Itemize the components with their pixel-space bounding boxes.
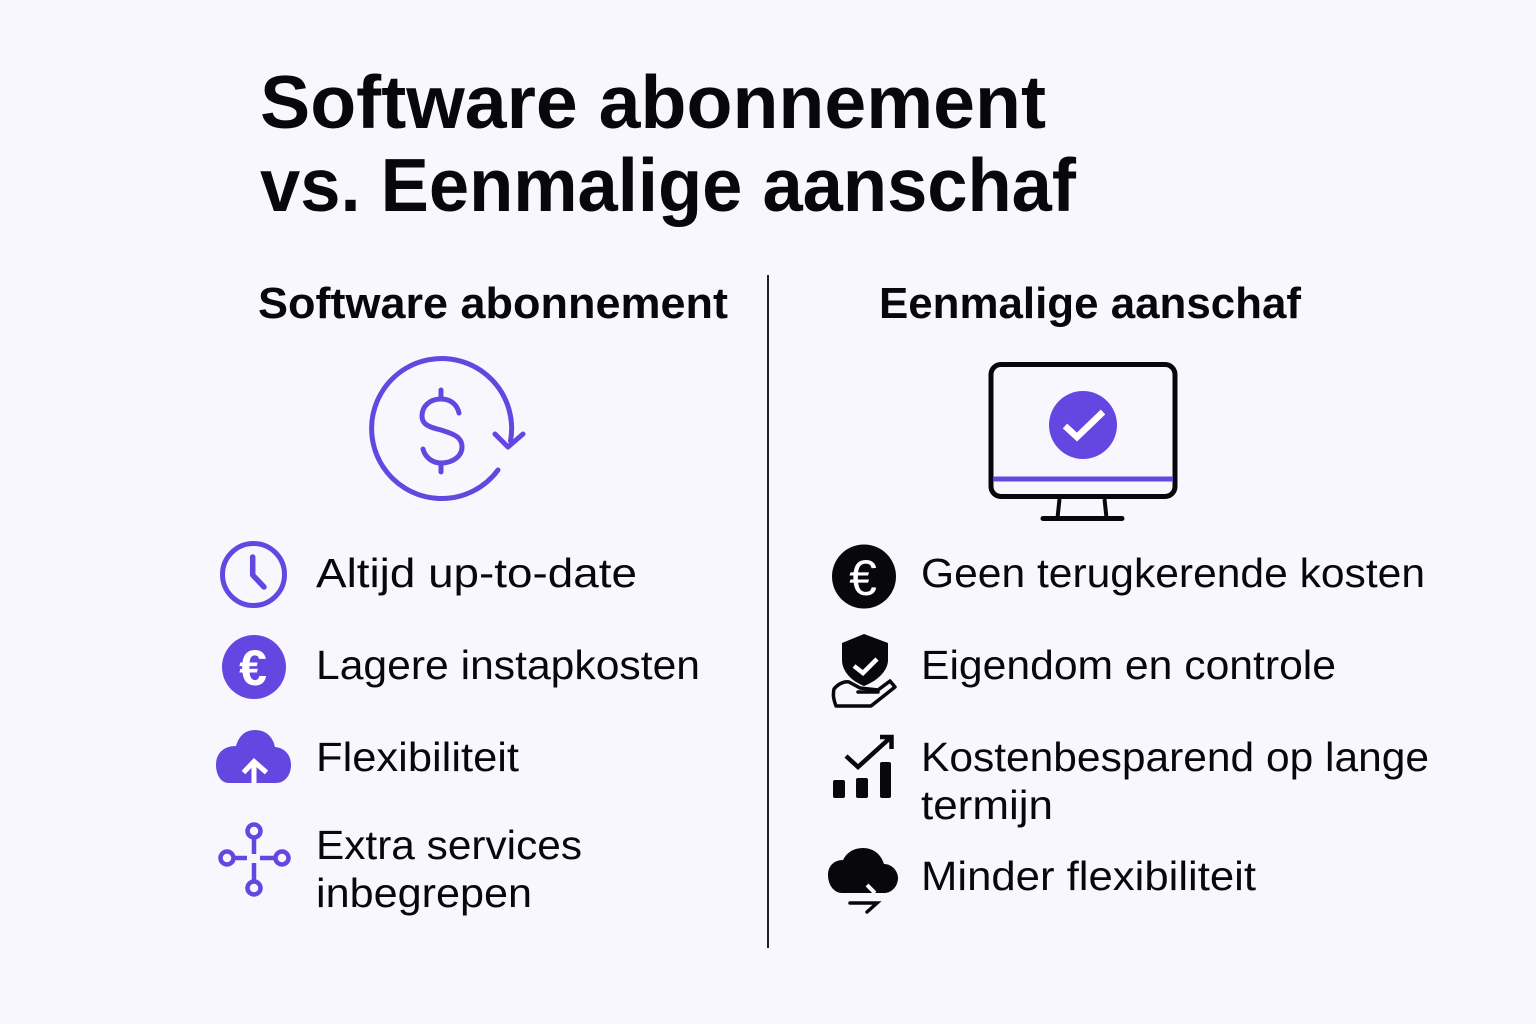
icon: monitor with check <box>991 364 1175 518</box>
item: lagere instapkosten <box>222 635 700 699</box>
label: extra services inbegrepen: Extra services <box>316 822 582 868</box>
title <box>260 60 1077 227</box>
label: extra services inbegrepen: inbegrepen <box>316 870 532 916</box>
item: extra services inbegrepen <box>220 822 582 916</box>
item: minder flexibiliteit <box>828 848 1257 912</box>
item: kostenbesparend op lange termijn <box>833 734 1429 828</box>
panel: software abonnement <box>216 279 728 916</box>
label: extra services inbegrepen <box>316 822 582 916</box>
label: geen terugkerende kosten: Geen terugkerende kosten <box>921 550 1425 596</box>
label: minder flexibiliteit: Minder flexibiliteit <box>921 853 1257 899</box>
label: eigendom en controle: Eigendom en controle <box>921 642 1336 688</box>
heading: software abonnement: Software abonnement <box>258 279 728 328</box>
icon: euro coin: € <box>239 640 267 696</box>
item: altijd up-to-date <box>222 544 637 606</box>
icon: cloud with arrow <box>828 848 898 912</box>
icon: rising bar chart <box>833 737 892 798</box>
title: vs. Eenmalige aanschaf <box>260 143 1077 227</box>
heading: eenmalige aanschaf: Eenmalige aanschaf <box>879 279 1301 328</box>
icon: network nodes <box>220 824 288 894</box>
item: flexibiliteit <box>216 730 520 783</box>
icon: shield on hand <box>833 634 895 706</box>
label: flexibiliteit: Flexibiliteit <box>316 734 520 780</box>
icon: recurring dollar <box>372 359 523 499</box>
icon: clock <box>222 544 284 606</box>
icon: euro coin <box>222 635 286 699</box>
title: Software abonnement <box>260 60 1046 144</box>
icon: cloud upload <box>216 730 291 783</box>
label: lagere instapkosten: Lagere instapkosten <box>316 642 700 688</box>
icon: black euro coin: € <box>849 550 877 606</box>
label: kostenbesparend op lange termijn: Kostenbesparend op lange <box>921 734 1429 780</box>
label: kostenbesparend op lange termijn: termijn <box>921 782 1053 828</box>
label: kostenbesparend op lange termijn <box>921 734 1429 828</box>
icon: black euro coin <box>832 544 896 608</box>
item: geen terugkerende kosten <box>832 544 1425 608</box>
label: altijd up-to-date: Altijd up-to-date <box>316 550 637 596</box>
item: eigendom en controle <box>833 634 1336 706</box>
panel: eenmalige aanschaf <box>828 279 1429 912</box>
